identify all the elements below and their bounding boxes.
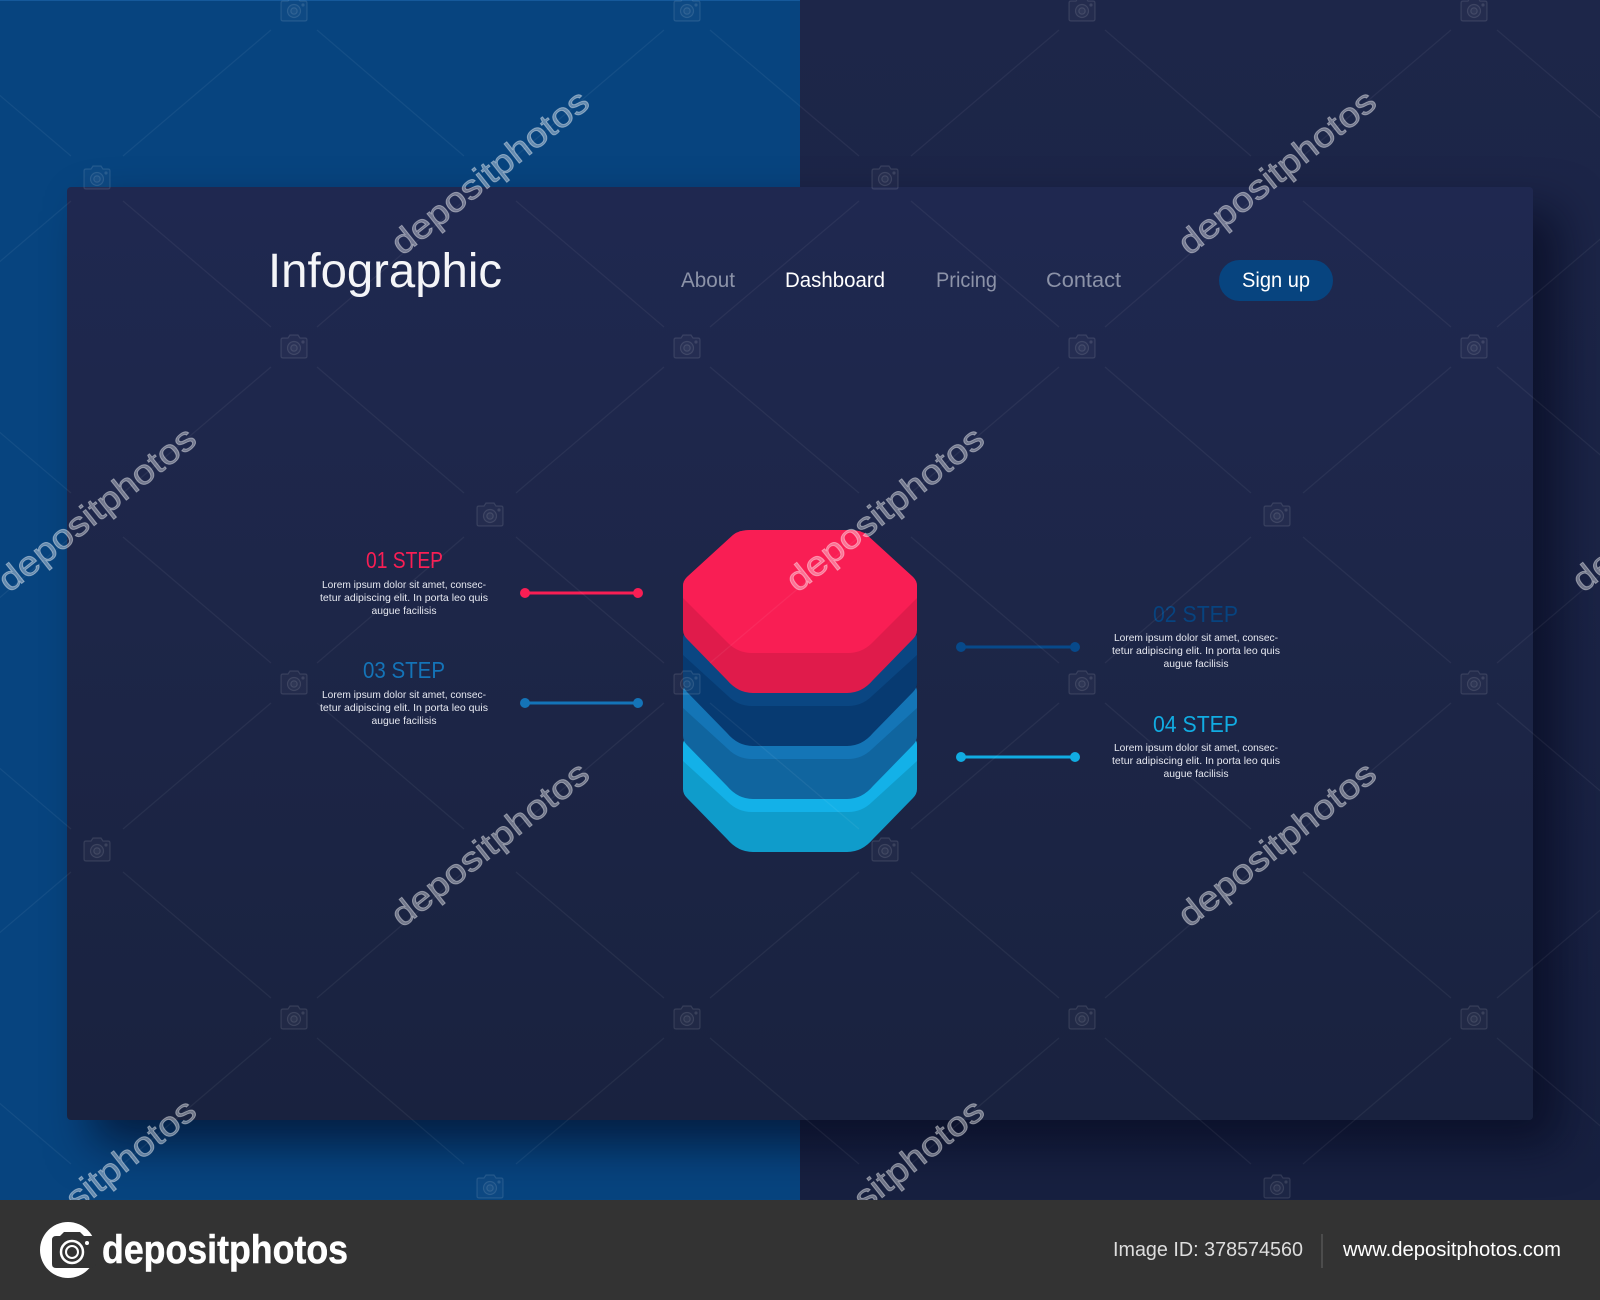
step 01 connector: [520, 588, 643, 598]
step 02 text: augue facilisis: [1164, 658, 1228, 670]
step 03 block: [320, 657, 643, 727]
logo wordmark: depositphotos: [102, 1228, 348, 1272]
step 04 text: Lorem ipsum dolor sit amet, consec-: [1114, 742, 1278, 754]
stock watermark overlay: depositphotos: [779, 419, 992, 600]
step 04 text: tetur adipiscing elit. In porta leo quis: [1112, 755, 1280, 767]
stock watermark overlay: depositphotos: [1171, 754, 1384, 935]
panel: main card: [67, 187, 1533, 1120]
step 03 text: [320, 689, 488, 727]
header: [268, 245, 1333, 301]
stock watermark overlay: depositphotos: [779, 1091, 992, 1272]
step 01 text: tetur adipiscing elit. In porta leo quis: [320, 592, 488, 604]
nav: Pricing: Pricing: [936, 269, 997, 292]
step 02 text: Lorem ipsum dolor sit amet, consec-: [1114, 632, 1278, 644]
step 03 connector: [520, 698, 643, 708]
step 04 text: [1112, 742, 1280, 780]
step 02 block: [956, 601, 1280, 670]
button: Sign up: Sign up: [1242, 269, 1310, 292]
step 01 heading: 01 STEP: [366, 547, 443, 573]
image id: Image ID: 378574560: [1113, 1239, 1303, 1261]
background: navy right half: [800, 0, 1600, 1200]
title: Infographic: [268, 245, 502, 298]
stock watermark overlay: depositphotos: [384, 82, 597, 263]
divider: [1321, 1234, 1323, 1268]
footer bar: [0, 1200, 1600, 1300]
step 04 connector: [956, 752, 1080, 762]
step 03 heading: 03 STEP: [363, 657, 445, 683]
step 01 block: [320, 547, 643, 617]
step 02 text: tetur adipiscing elit. In porta leo quis: [1112, 645, 1280, 657]
step 01 text: augue facilisis: [372, 605, 436, 617]
step 03 text: augue facilisis: [372, 715, 436, 727]
step 01 text: [320, 579, 488, 617]
background: blue left half: [0, 0, 800, 1200]
layer 01: red: [683, 530, 917, 693]
step 01 text: Lorem ipsum dolor sit amet, consec-: [322, 579, 486, 591]
icon: logo camera: [40, 1222, 96, 1278]
layer 03: medium blue: [683, 636, 917, 799]
stock watermark overlay: depositphotos: [1171, 82, 1384, 263]
stacked hexagon chart: [683, 530, 917, 852]
nav: About: About: [681, 269, 735, 292]
stock watermark overlay: depositphotos: [384, 754, 597, 935]
button: Sign up: [1219, 260, 1333, 301]
step 02 connector: [956, 642, 1080, 652]
nav: Contact: Contact: [1046, 269, 1121, 292]
nav: Dashboard: Dashboard: [785, 269, 885, 292]
step 02 text: [1112, 632, 1280, 670]
website url: www.depositphotos.com: [1342, 1239, 1561, 1261]
step 04 text: augue facilisis: [1164, 768, 1228, 780]
step 03 text: Lorem ipsum dolor sit amet, consec-: [322, 689, 486, 701]
layer 04: light blue: [683, 689, 917, 852]
step 03 text: tetur adipiscing elit. In porta leo quis: [320, 702, 488, 714]
layer 02: dark blue: [683, 583, 917, 746]
step 02 heading: 02 STEP: [1153, 601, 1238, 627]
step 04 heading: 04 STEP: [1153, 711, 1238, 737]
step 04 block: [956, 711, 1280, 780]
